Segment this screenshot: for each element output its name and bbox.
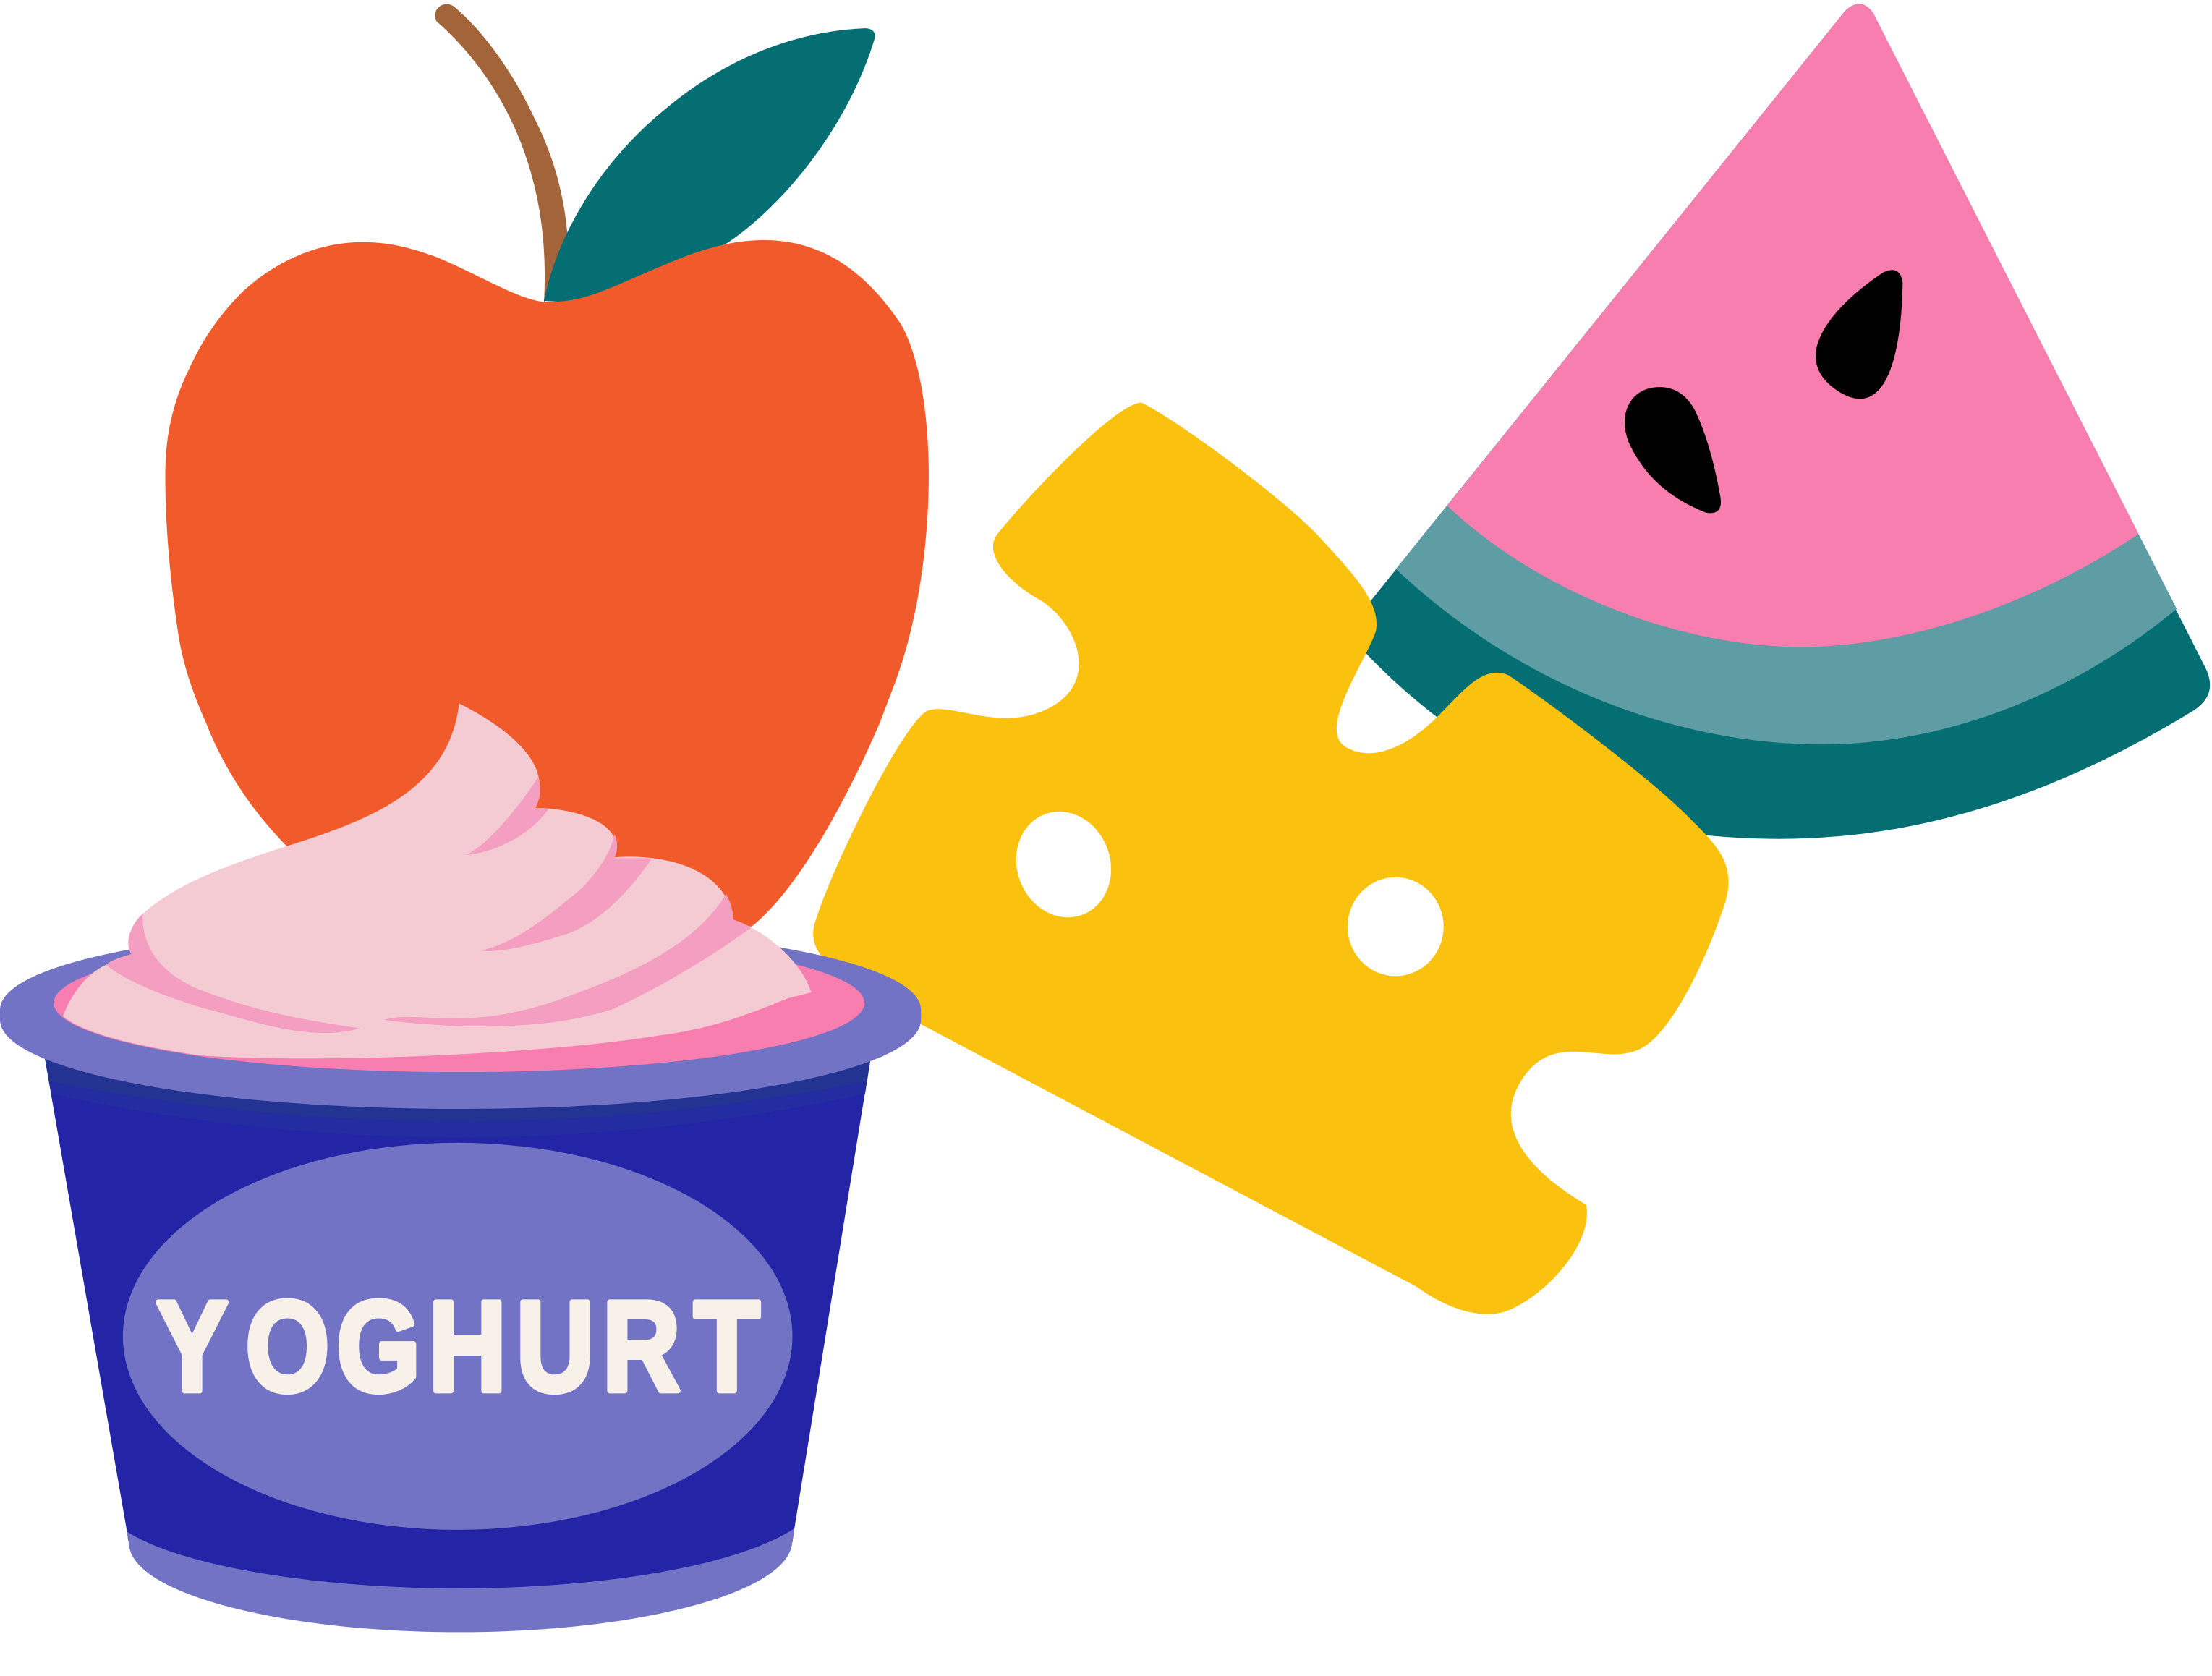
cup shadow band upper: [44, 1052, 872, 1121]
label text: YOGHURT: [156, 1274, 760, 1418]
watermelon pale band: [1396, 4, 2177, 744]
cup shadow band lower: [44, 1052, 872, 1138]
yoghurt swirl: [63, 704, 812, 1058]
cup label oval: [123, 1143, 792, 1530]
cheese hole right: [1348, 877, 1444, 976]
watermelon rind: [1346, 4, 2210, 839]
apple: [165, 4, 929, 927]
watermelon slice: [1346, 4, 2210, 839]
swirl main: [63, 704, 812, 1058]
watermelon seed right: [1816, 270, 1902, 399]
apple leaf: [544, 28, 875, 304]
yoghurt cup: [0, 925, 921, 1632]
cup body: [44, 1052, 872, 1603]
cheese body: [813, 403, 1729, 1314]
cheese wedge: [813, 403, 1729, 1314]
apple body: [165, 240, 929, 927]
cup rim: [0, 925, 921, 1109]
yoghurt surface: [54, 934, 864, 1072]
cup base lip: [127, 1528, 794, 1632]
apple stem: [435, 4, 568, 304]
swirl shadow middle: [480, 834, 652, 951]
watermelon flesh: [1447, 4, 2138, 647]
watermelon seed left: [1625, 387, 1721, 513]
swirl shadow left: [106, 914, 360, 1033]
swirl shadow lower: [384, 894, 752, 1026]
swirl shadow top: [464, 777, 549, 855]
cheese hole left: [1001, 798, 1126, 931]
